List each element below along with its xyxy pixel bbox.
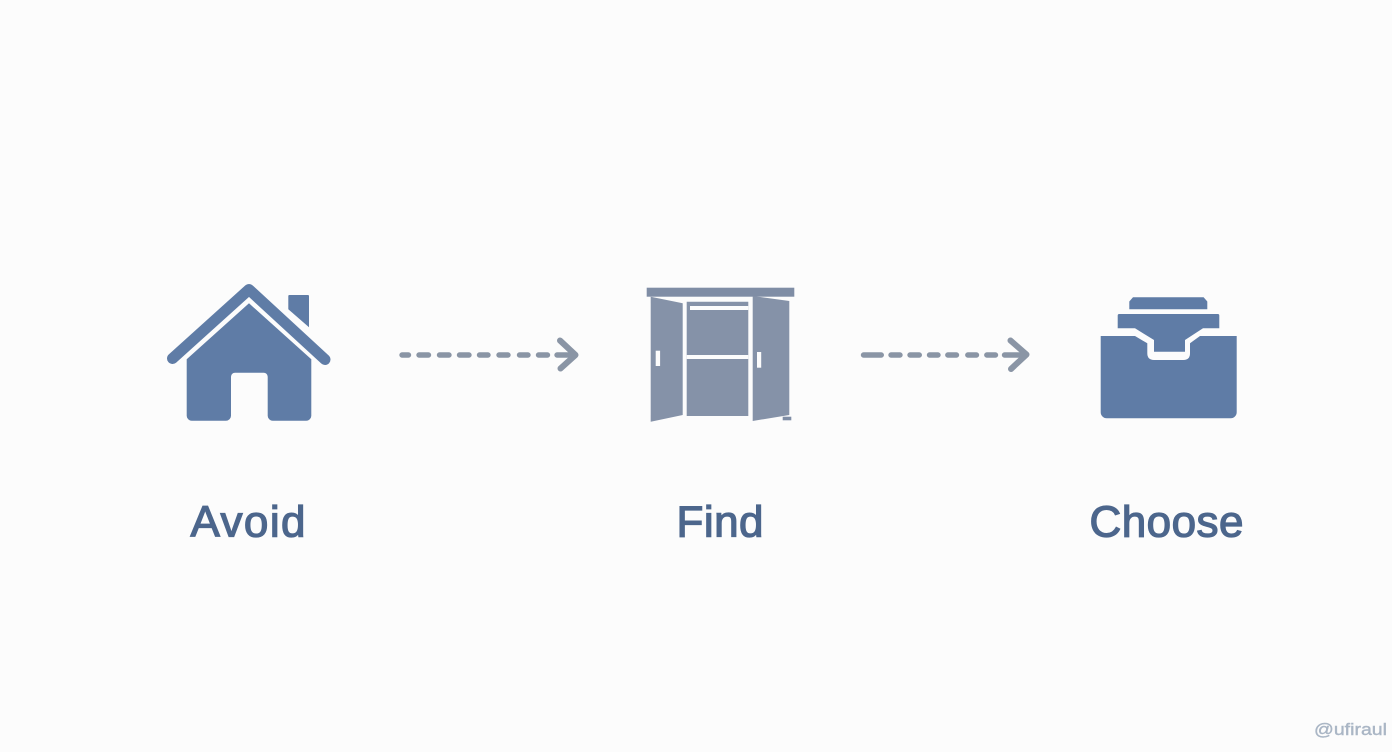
interior shelf gaps xyxy=(687,306,748,359)
right door xyxy=(753,296,789,421)
cabinet top bar xyxy=(647,288,794,297)
arrow: avoid to find xyxy=(402,340,576,368)
icon: inbox tray xyxy=(1101,297,1237,418)
left door handle xyxy=(656,351,660,366)
tray body xyxy=(1101,336,1237,418)
right door handle xyxy=(757,352,761,368)
label: Find: Find xyxy=(676,498,764,546)
top card xyxy=(1129,297,1207,309)
watermark: @ufiraul xyxy=(1314,720,1387,739)
middle card xyxy=(1118,314,1219,352)
label: Avoid: Avoid xyxy=(190,498,306,546)
door foot xyxy=(783,417,791,420)
icon: open cabinet xyxy=(647,288,794,422)
icon: house xyxy=(172,290,325,421)
arrow: find to choose xyxy=(864,340,1026,369)
left door xyxy=(651,297,683,422)
cabinet interior xyxy=(687,302,748,416)
label: Choose: Choose xyxy=(1090,498,1244,546)
